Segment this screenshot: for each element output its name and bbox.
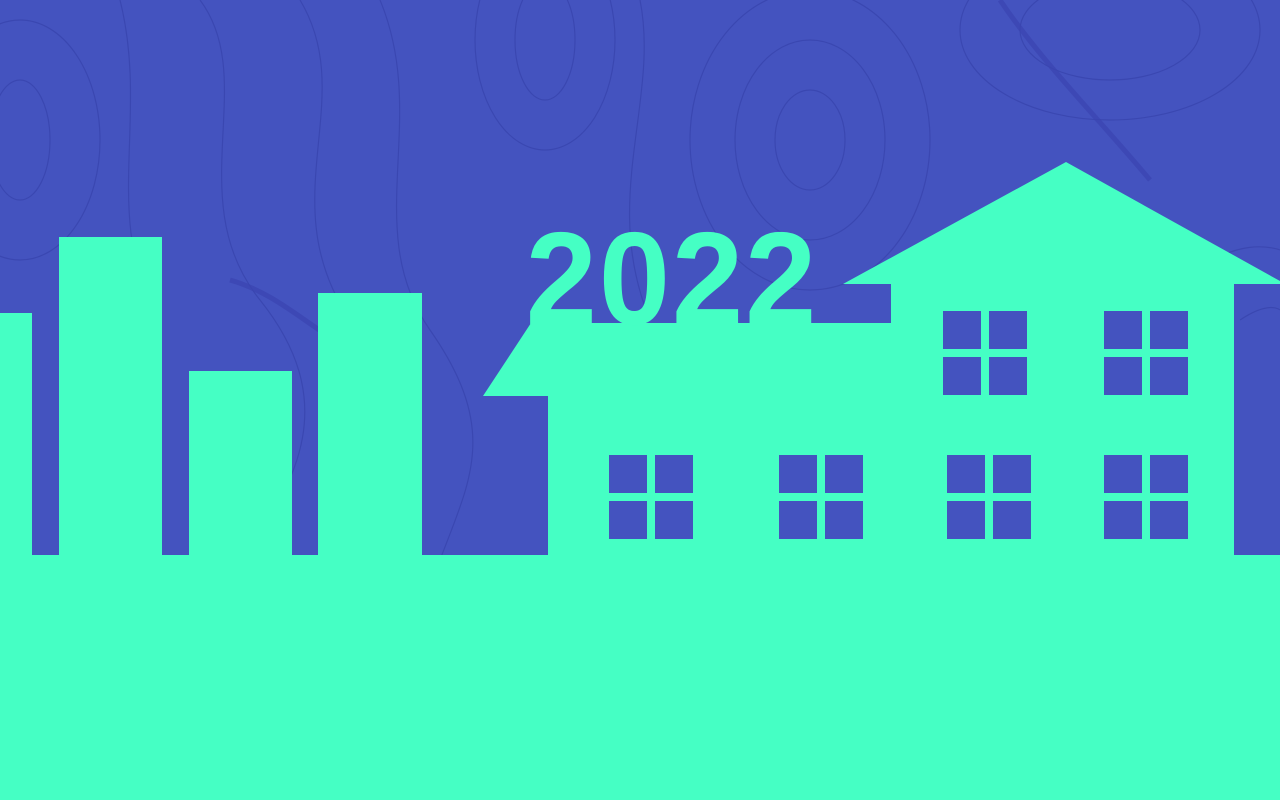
ground — [0, 555, 1280, 800]
title: 2022: 2022 — [526, 204, 818, 352]
bar chart — [0, 237, 422, 556]
windows — [609, 311, 1188, 539]
house — [483, 162, 1280, 556]
